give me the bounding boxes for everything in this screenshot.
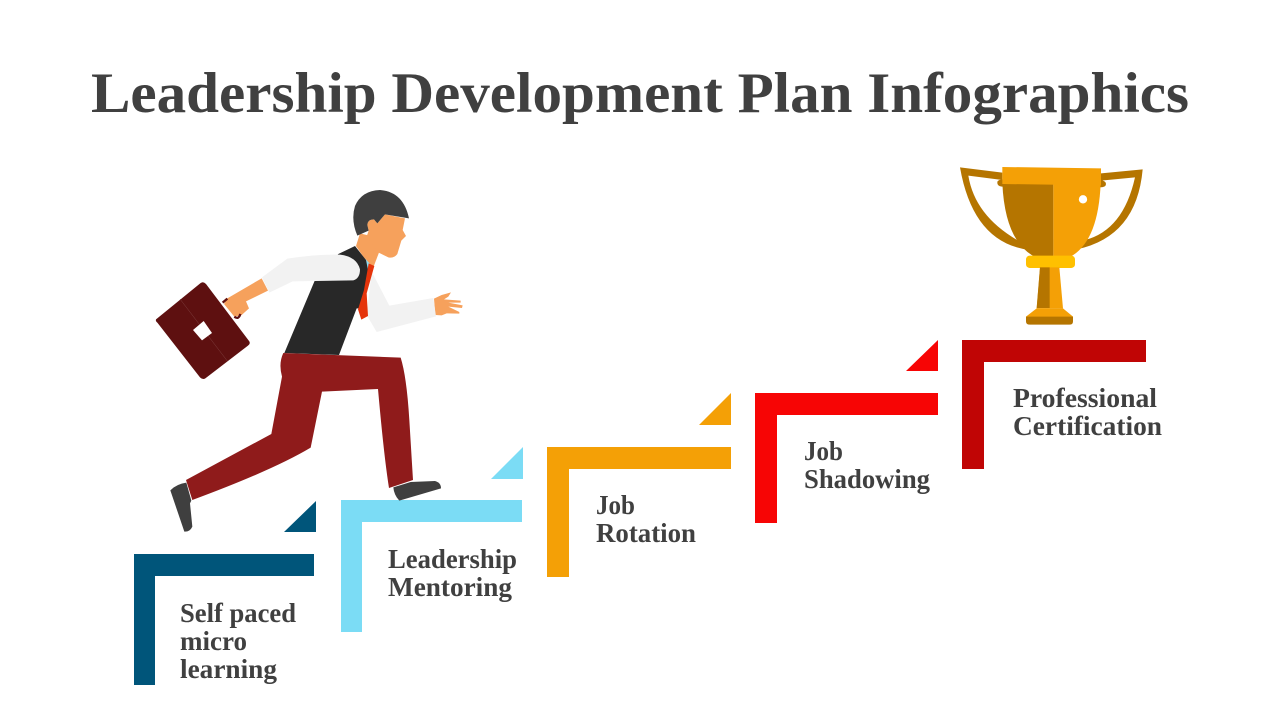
step 1: self paced micro learning [134,501,316,685]
step 1 bracket [134,554,314,685]
step 3 label: Rotation [596,518,696,548]
step 2 label: Leadership [388,544,517,574]
near sleeve [262,255,360,293]
tie [358,263,374,320]
cup rim [1002,167,1101,185]
step 3 corner triangle [699,393,731,425]
far arm and hand [367,272,463,332]
icon: gold trophy [960,167,1143,325]
step 3: job rotation [547,393,731,577]
step 3 bracket [547,447,731,577]
base top [1026,308,1073,319]
vest [284,246,370,355]
briefcase handle [223,299,240,318]
stem [1037,267,1063,308]
back shoe [170,483,192,532]
trousers [186,353,413,500]
front shoe [393,481,441,501]
base bottom [1026,317,1073,325]
briefcase [156,282,250,379]
step 3 label: Job [596,490,635,520]
icon: running businessman with briefcase [156,190,463,532]
step 5: professional certification [962,340,1162,469]
briefcase seam [180,299,227,361]
briefcase body [156,282,250,379]
handle pegs [997,179,1106,187]
cup right light [1053,183,1101,256]
cup highlight [1079,195,1087,203]
shirt collar [365,258,371,280]
step 2 label: Mentoring [388,572,512,602]
step 4: job shadowing [755,340,938,523]
stem shade [1037,267,1050,308]
trophy handles [960,167,1143,250]
stem collar [1026,256,1075,268]
step 4 corner triangle [906,340,938,371]
step 1 label: Self paced [180,598,296,628]
step 4 label: Shadowing [804,464,930,494]
hair [353,190,409,236]
step 1 corner triangle [284,501,316,532]
step 2 corner triangle [491,447,523,479]
step 2: leadership mentoring [341,447,523,632]
neck [356,233,379,267]
head face [367,214,406,258]
step 1 label: micro [180,626,247,656]
step 2 bracket [341,500,522,632]
briefcase clasp [193,321,212,340]
step 4 label: Job [804,436,843,466]
step 1 label: learning [180,654,277,684]
near hand and forearm [224,278,268,317]
cup left shade [1002,183,1053,256]
step 4 bracket [755,393,938,523]
title: Leadership Development Plan Infographics [91,62,1189,125]
step 5 label: Professional [1013,383,1158,413]
step 5 label: Certification [1013,411,1162,441]
step 5 bracket [962,340,1146,469]
